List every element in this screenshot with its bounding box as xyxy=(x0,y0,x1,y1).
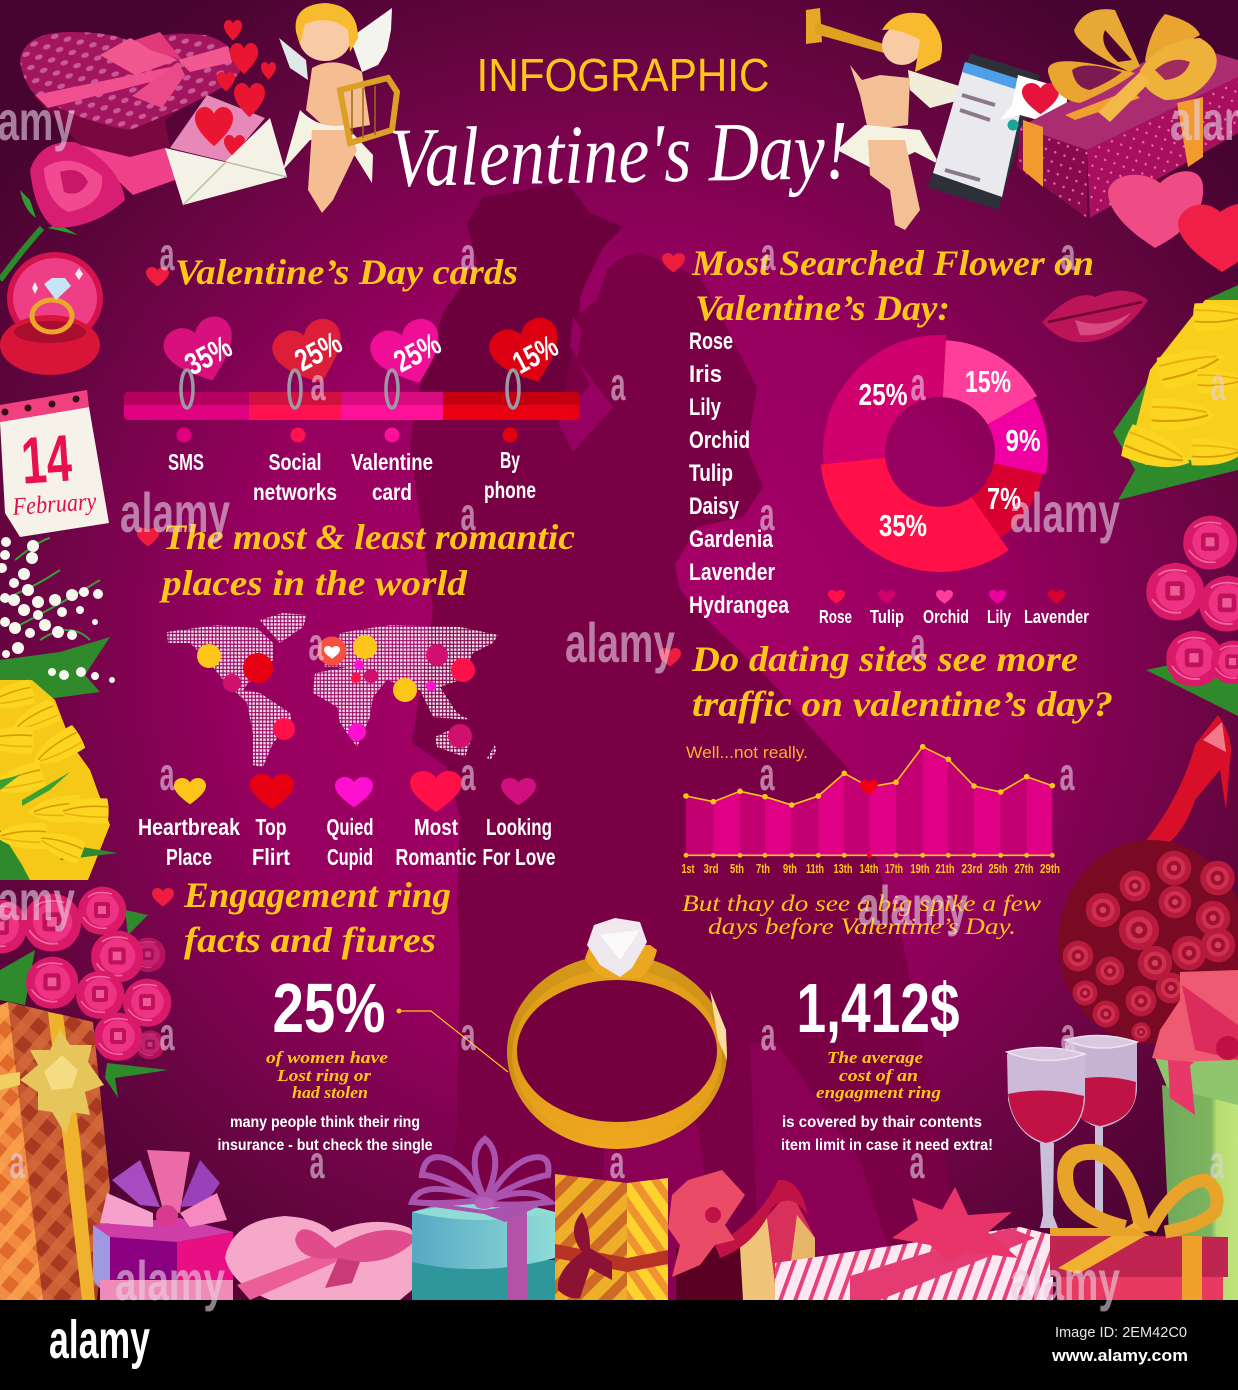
heading: romantic places: places in the world xyxy=(159,563,468,603)
text: 25% caption: Lost ring or xyxy=(276,1066,371,1085)
panel: dating sites xyxy=(659,639,1113,939)
watermarks: a xyxy=(1060,228,1076,280)
watermarks: a xyxy=(460,488,476,540)
legend labels xyxy=(138,814,556,870)
legend labels: Most xyxy=(414,814,458,840)
map markers xyxy=(197,635,475,748)
heading: engagement ring xyxy=(183,875,451,960)
donut chart: 15% xyxy=(965,364,1011,399)
watermarks: a xyxy=(10,1136,25,1188)
heading icon xyxy=(659,648,681,667)
gift: hexagon box xyxy=(93,1150,233,1300)
chart axis labels: 21th xyxy=(936,861,955,876)
heading: romantic places: The most & least romantic xyxy=(163,517,575,557)
heading icon xyxy=(137,528,159,547)
heading icon xyxy=(146,267,169,287)
chart axis labels: 9th xyxy=(783,861,797,876)
icon: calendar 14 february xyxy=(0,390,109,537)
caption: big spike: But thay do see a big spike a few xyxy=(682,891,1042,916)
watermarks: a xyxy=(610,1136,625,1188)
icon: pink hearts right xyxy=(1108,171,1238,272)
stat: 25%: 25% xyxy=(272,969,386,1047)
watermarks: a xyxy=(1210,358,1226,410)
flower list: Lily xyxy=(689,394,722,421)
chart axis labels: 17th xyxy=(885,861,903,876)
decoration: gift box top right xyxy=(1017,9,1238,218)
heading: dating sites: traffic on valentine’s day? xyxy=(692,684,1113,724)
watermarks: a xyxy=(910,618,926,670)
gift: gold ribbon red box xyxy=(1050,1152,1228,1300)
icon: lips xyxy=(1042,291,1148,342)
heading: romantic places xyxy=(159,517,575,603)
watermarks: a xyxy=(1060,748,1075,800)
decoration: tulips right xyxy=(1113,285,1238,500)
flower list: Lavender xyxy=(689,559,775,586)
labels xyxy=(168,447,536,505)
donut chart xyxy=(821,335,1048,572)
watermarks: a xyxy=(760,488,775,540)
text: cost caption: item limit in case it need extra! xyxy=(781,1137,993,1154)
chart axis labels xyxy=(682,861,1060,876)
watermarks: a xyxy=(1060,1008,1076,1060)
donut legend: Rose xyxy=(819,607,852,627)
text: 25% caption: of women have xyxy=(266,1048,389,1067)
gift: striped yellow box xyxy=(555,1174,668,1300)
decoration: green gift box xyxy=(1152,970,1238,1300)
callout line xyxy=(396,1008,508,1072)
heading: dating sites xyxy=(691,639,1113,724)
legend labels: Looking xyxy=(486,814,552,840)
watermarks: a xyxy=(760,748,775,800)
footer: alamy logo and image id: alamy xyxy=(49,1310,150,1370)
labels: Valentine xyxy=(351,449,433,475)
legend labels: Top xyxy=(256,814,286,840)
watermarks: alamy xyxy=(565,611,675,674)
legend labels: Romantic xyxy=(396,844,477,870)
icon: trumpet cupid xyxy=(806,8,972,230)
donut legend: Orchid xyxy=(923,607,969,627)
text: 25% caption: had stolen xyxy=(292,1083,368,1102)
decoration: yellow tulips left xyxy=(0,679,118,880)
stat: cost: 1,412$ xyxy=(796,969,960,1047)
text: cost caption: cost of an xyxy=(839,1066,918,1085)
gift: striped white box xyxy=(775,1187,1053,1300)
text: 25% caption xyxy=(218,1048,433,1154)
watermarks: alamy xyxy=(115,1249,225,1312)
chart axis labels: 23rd xyxy=(962,861,983,876)
icon: smartphone with chat xyxy=(928,53,1067,210)
labels: By xyxy=(500,447,520,473)
footer: alamy logo and image id: www.alamy.com xyxy=(1051,1346,1188,1365)
flower list: Gardenia xyxy=(689,526,774,553)
title: infographic: INFOGRAPHIC xyxy=(476,49,770,101)
heart: 25% valentine xyxy=(366,314,452,395)
heading: most searched flower: Valentine’s Day: xyxy=(695,288,950,328)
watermarks: a xyxy=(308,618,324,670)
decoration: rose with stem xyxy=(0,142,125,280)
watermarks: a xyxy=(160,1008,175,1060)
labels: Social xyxy=(268,449,322,475)
donut legend: Lily xyxy=(987,607,1011,627)
panel: valentine's day cards xyxy=(124,252,580,505)
heading: most searched flower: Most Searched Flower on xyxy=(691,243,1094,283)
footer: alamy logo and image id xyxy=(49,1310,1188,1370)
labels: networks xyxy=(253,479,337,505)
donut chart: 7% xyxy=(987,481,1021,516)
flower list: Iris xyxy=(689,361,722,388)
watermarks: a xyxy=(1210,1136,1225,1188)
decoration: lily of the valley xyxy=(0,537,115,700)
watermarks: a xyxy=(160,228,175,280)
legend labels: Place xyxy=(166,844,212,870)
watermarks: a xyxy=(460,228,476,280)
text: cost caption: is covered by thair contents xyxy=(782,1114,982,1131)
decoration: plaid gift box xyxy=(0,1002,110,1300)
caption: big spike: days before Valentine’s Day. xyxy=(708,914,1016,939)
chart axis labels: 1st xyxy=(682,861,695,876)
flower list: Hydrangea xyxy=(689,592,790,619)
watermarks: a xyxy=(610,358,626,410)
heading icon xyxy=(662,253,685,273)
watermarks: a xyxy=(760,1008,776,1060)
flower list: Daisy xyxy=(689,493,740,520)
heading: most searched flower xyxy=(691,243,1094,328)
labels: phone xyxy=(484,477,536,503)
heading icon xyxy=(152,888,174,907)
watermarks: a xyxy=(910,358,926,410)
heart: 35% xyxy=(159,311,245,392)
bullet dots xyxy=(176,428,518,442)
legend labels: Flirt xyxy=(252,844,290,870)
heart: 15%: 15% xyxy=(507,328,564,381)
labels: SMS xyxy=(168,449,204,475)
chart axis labels: 5th xyxy=(730,861,744,876)
heart: 25% social: 25% xyxy=(289,325,348,378)
chart axis labels: 29th xyxy=(1040,861,1060,876)
decoration: red roses bouquet xyxy=(1058,840,1238,1044)
panel: romantic places xyxy=(137,517,575,870)
chart axis labels: 13th xyxy=(834,861,853,876)
title: valentine's day: Valentine's Day! xyxy=(389,104,849,205)
icon: calendar 14 february: February xyxy=(11,488,98,521)
text: cost caption: The average xyxy=(827,1048,924,1067)
icon: calendar 14 february: 14 xyxy=(19,420,74,498)
legend labels: Cupid xyxy=(327,844,373,870)
decoration: peonies left xyxy=(0,886,171,1098)
icon: envelope with hearts xyxy=(165,20,287,205)
watermarks: a xyxy=(310,358,326,410)
icon: wine glasses xyxy=(1007,1035,1137,1228)
caption: big spike xyxy=(682,891,1042,939)
chart axis labels: 11th xyxy=(806,861,824,876)
heading: engagement ring: facts and fiures xyxy=(184,920,436,960)
heart: 25% valentine: 25% xyxy=(388,326,447,379)
caption: well not really: Well...not really. xyxy=(686,743,808,762)
heading: dating sites: Do dating sites see more xyxy=(691,639,1078,679)
silhouette: couple xyxy=(410,183,965,1300)
decoration: gifts row xyxy=(93,1139,1228,1300)
watermarks: alamy xyxy=(1010,481,1120,544)
chart axis labels: 14th xyxy=(860,861,879,876)
gift: red house box xyxy=(668,1170,815,1300)
decoration: heart gift box top left xyxy=(20,32,240,195)
flower list: Tulip xyxy=(689,460,733,487)
heart: 25% social xyxy=(268,314,354,395)
flower list: Rose xyxy=(689,328,733,355)
donut legend: Lavender xyxy=(1024,607,1089,627)
chart axis labels: 7th xyxy=(756,861,770,876)
chart axis labels: 25th xyxy=(988,861,1008,876)
chart axis labels: 19th xyxy=(910,861,930,876)
icon: gold ring xyxy=(507,918,727,1149)
watermarks: alamy xyxy=(858,874,968,937)
heading: engagement ring: Engagement ring xyxy=(183,875,451,915)
gift: teal cylinder xyxy=(412,1139,555,1300)
watermarks: a xyxy=(310,1136,325,1188)
gift: pink heart box xyxy=(225,1216,421,1300)
icon: ring box xyxy=(0,252,103,375)
watermarks: a xyxy=(460,748,476,800)
watermarks: a xyxy=(160,748,175,800)
donut chart: 9% xyxy=(1006,423,1040,458)
dotted world map xyxy=(167,613,498,767)
title xyxy=(389,49,849,205)
text: cost caption xyxy=(781,1048,993,1154)
text: 25% caption: insurance - but check the single xyxy=(218,1137,433,1154)
heading: valentine's day cards: Valentine’s Day cards xyxy=(175,252,518,292)
watermarks: a xyxy=(760,228,776,280)
donut legend xyxy=(819,590,1089,627)
chart axis labels: 3rd xyxy=(704,861,719,876)
flower list: Orchid xyxy=(689,427,750,454)
donut chart: 25% xyxy=(858,377,908,412)
legend labels: Quied xyxy=(326,814,374,840)
chart axis labels: 27th xyxy=(1014,861,1034,876)
flower list xyxy=(689,328,790,619)
legend labels: Heartbreak xyxy=(138,814,240,840)
watermarks: alamy xyxy=(120,481,230,544)
donut legend: Tulip xyxy=(870,607,904,627)
text: cost caption: engagment ring xyxy=(816,1083,942,1102)
progress bar xyxy=(124,392,580,420)
icon: cupid with harp xyxy=(279,3,397,213)
area chart xyxy=(683,744,1055,858)
legend labels: For Love xyxy=(482,844,556,870)
heart: 35%: 35% xyxy=(179,329,238,382)
watermarks: a xyxy=(910,1136,925,1188)
panel: engagement ring facts xyxy=(152,875,993,1154)
text: 25% caption: many people think their ring xyxy=(230,1114,420,1131)
heart: 15% xyxy=(485,313,571,394)
watermarks: a xyxy=(460,1008,476,1060)
legend hearts xyxy=(174,771,536,812)
donut chart: 35% xyxy=(879,508,927,543)
binder rings xyxy=(181,370,519,408)
labels: card xyxy=(372,479,412,505)
decoration: peonies right xyxy=(1146,516,1238,716)
watermarks: alamy xyxy=(1010,1249,1120,1312)
panel: most searched flower xyxy=(662,243,1094,627)
footer: alamy logo and image id: Image ID: 2EM42C0 xyxy=(1055,1324,1187,1341)
icon: red high heel xyxy=(1140,715,1231,852)
